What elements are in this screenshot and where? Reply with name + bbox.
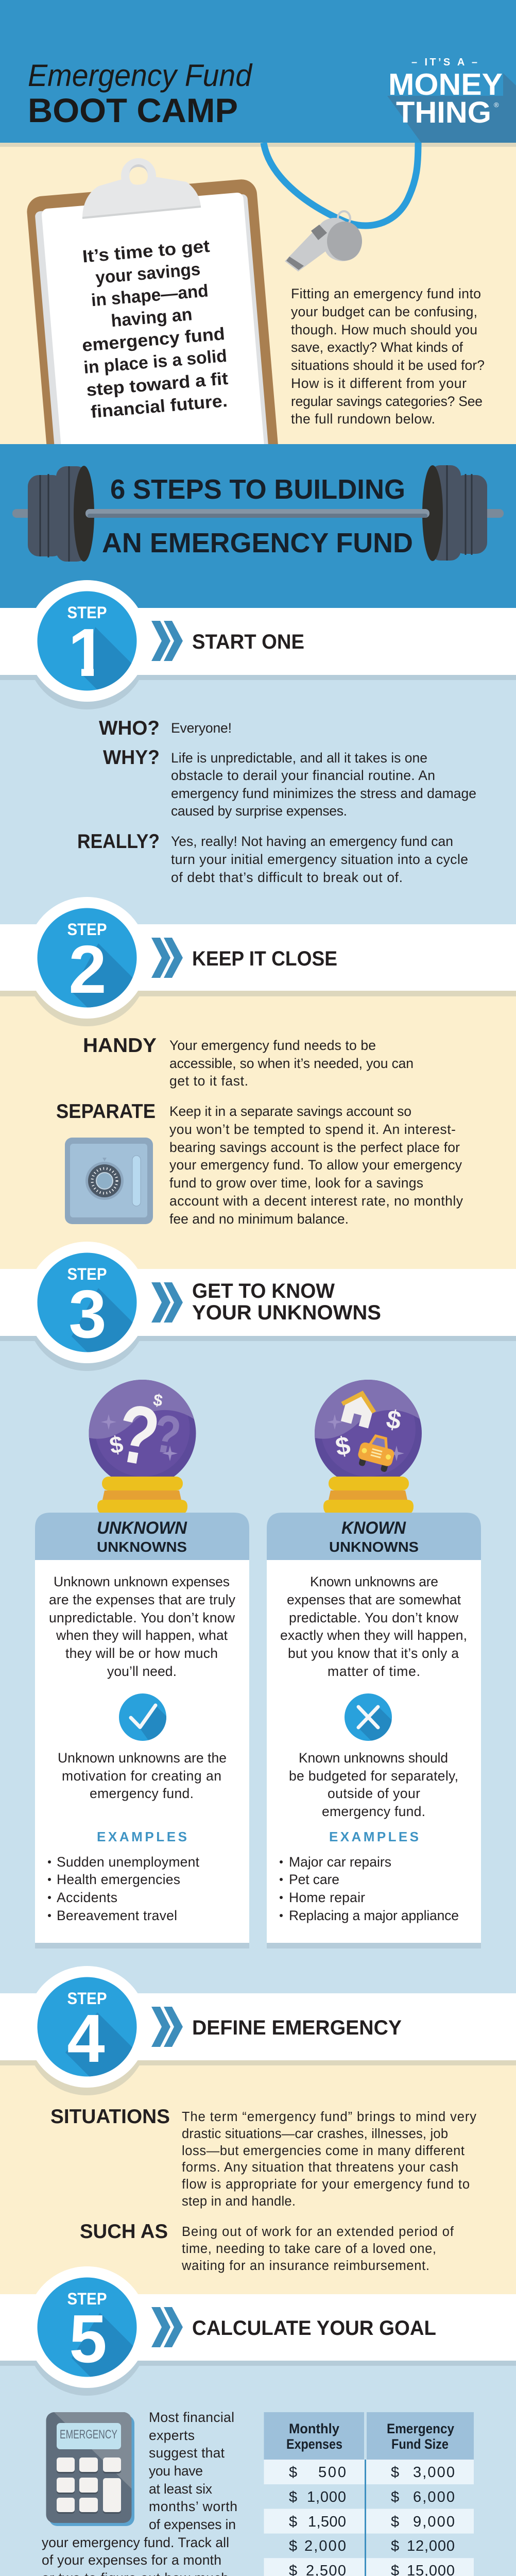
table rows: $ xyxy=(289,2464,297,2481)
budgeting text: Known unknowns should xyxy=(299,1750,448,1766)
table rows: 1,500 xyxy=(308,2514,346,2530)
step 2 header xyxy=(0,897,516,1026)
section background: step 3 xyxy=(0,1336,516,1993)
description: you’ll need. xyxy=(107,1664,177,1679)
chevrons xyxy=(151,2007,183,2047)
description: expenses that are somewhat xyxy=(287,1592,461,1607)
description: unpredictable. You don’t know xyxy=(49,1610,235,1625)
why: Life is unpredictable, and all it takes is one xyxy=(171,750,427,766)
description: when they will happen, what xyxy=(56,1628,228,1643)
separate: Keep it in a separate savings account so xyxy=(169,1104,411,1119)
step 5 header xyxy=(0,2266,516,2396)
examples list: Accidents xyxy=(57,1890,117,1905)
table: monthly expenses vs fund size xyxy=(264,2412,474,2576)
icon: check mark xyxy=(119,1693,166,1741)
crystal ball: unknown unknowns: $ xyxy=(152,1390,164,1410)
panel heading: UNKNOWN xyxy=(97,1518,187,1538)
such as: SUCH AS xyxy=(80,2221,168,2243)
situations: step in and handle. xyxy=(182,2194,296,2209)
table rows: 12,000 xyxy=(407,2538,455,2554)
section background: step 1 xyxy=(0,675,516,924)
handy: accessible, so when it’s needed, you can xyxy=(169,1056,414,1071)
chevrons xyxy=(151,621,183,661)
such as: waiting for an insurance reimbursement. xyxy=(181,2259,429,2273)
separate: fund to grow over time, look for a savings xyxy=(169,1175,423,1191)
crystal ball: unknown unknowns xyxy=(87,1377,198,1513)
icon: calculator xyxy=(46,2412,134,2526)
table header: Monthly xyxy=(289,2421,339,2436)
motivation text: motivation for creating an xyxy=(62,1768,221,1784)
situations: The term “emergency fund” brings to mind very xyxy=(182,2110,476,2124)
examples list: Bereavement travel xyxy=(57,1908,177,1923)
description: matter of time. xyxy=(328,1664,420,1679)
table rows: $ xyxy=(391,2464,399,2481)
budgeting text: outside of your xyxy=(328,1786,420,1801)
motivation text: emergency fund. xyxy=(90,1786,194,1801)
crystal ball: unknown unknowns: $ xyxy=(108,1430,125,1459)
intro paragraph: situations should it be used for? xyxy=(291,358,485,373)
step 5 paragraph: experts xyxy=(149,2428,195,2443)
panel heading xyxy=(97,1518,187,1555)
banner heading: 6 STEPS TO BUILDING xyxy=(110,474,405,505)
table rows: $ xyxy=(391,2538,399,2554)
step 3 badge xyxy=(37,1253,137,1352)
intro paragraph: the full rundown below. xyxy=(291,411,435,427)
situations: drastic situations—car crashes, illnesses, job xyxy=(182,2127,448,2141)
step 4 content xyxy=(50,2106,476,2273)
description: Known unknowns are xyxy=(310,1574,438,1589)
separate: SEPARATE xyxy=(56,1100,156,1123)
section background: step 5 xyxy=(0,2361,516,2576)
step 3 heading xyxy=(192,1280,381,1324)
step 1 content xyxy=(77,717,476,885)
step 4 header xyxy=(0,1966,516,2095)
handy: HANDY xyxy=(83,1035,157,1057)
icon: safe xyxy=(65,1138,153,1224)
table rows: $ xyxy=(391,2514,399,2530)
examples list: Sudden unemployment xyxy=(57,1854,200,1870)
step 4 heading: DEFINE EMERGENCY xyxy=(192,2016,402,2039)
description: are the expenses that are truly xyxy=(49,1592,236,1607)
title: BOOT CAMP xyxy=(28,91,238,129)
situations: forms. Any situation that threatens your cash xyxy=(182,2160,458,2175)
panel heading: UNKNOWNS xyxy=(97,1539,187,1555)
section background: step 4 xyxy=(0,2060,516,2294)
separate xyxy=(56,1100,463,1227)
step 3 header xyxy=(0,1242,516,1371)
intro paragraph: though. How much should you xyxy=(291,322,477,337)
step 2 content xyxy=(56,1035,463,1227)
handy: Your emergency fund needs to be xyxy=(169,1038,376,1053)
why: obstacle to derail your financial routine. An xyxy=(171,768,435,783)
really: turn your initial emergency situation into a cycle xyxy=(171,852,468,867)
table rows: 3,000 xyxy=(413,2464,455,2481)
table rows: 9,000 xyxy=(413,2514,455,2530)
description xyxy=(49,1574,236,1679)
who xyxy=(99,717,232,739)
budgeting text: be budgeted for separately, xyxy=(289,1768,458,1784)
banner heading xyxy=(102,474,413,558)
icon: x mark xyxy=(345,1693,392,1741)
clipboard text: in shape—and xyxy=(91,281,209,310)
table header: Fund Size xyxy=(391,2436,449,2452)
description: they will be or how much xyxy=(65,1646,218,1661)
examples list xyxy=(48,1854,200,1923)
panel: known unknowns xyxy=(267,1513,481,1948)
intro paragraph: save, exactly? What kinds of xyxy=(291,340,463,355)
crystal ball: known unknowns: $ xyxy=(384,1404,403,1435)
handy xyxy=(83,1035,414,1089)
table rows: $ xyxy=(391,2489,399,2505)
description: exactly when they will happen, xyxy=(280,1628,467,1643)
chevrons xyxy=(151,2307,183,2347)
step 5 paragraph: Most financial xyxy=(149,2410,234,2425)
clipboard text: It’s time to get xyxy=(81,236,211,266)
table rows: $ xyxy=(289,2489,297,2505)
logo: It's a Money Thing: THING xyxy=(396,96,491,129)
panel heading: KNOWN xyxy=(341,1518,406,1538)
examples list: Pet care xyxy=(289,1872,339,1887)
step 5 paragraph: at least six xyxy=(149,2481,212,2497)
logo: It's a Money Thing: ® xyxy=(494,101,499,109)
crystal ball: known unknowns: $ xyxy=(333,1431,352,1462)
such as: time, needing to take care of a loved one, xyxy=(182,2242,436,2256)
crystal ball: known unknowns xyxy=(313,1377,424,1513)
intro paragraph xyxy=(291,286,485,427)
step 2 badge: STEP xyxy=(67,920,107,939)
who: Everyone! xyxy=(171,720,232,736)
handy: get to it fast. xyxy=(169,1073,248,1089)
step 1 header xyxy=(0,580,516,709)
who: WHO? xyxy=(99,717,160,739)
icon: calculator: EMERGENCY xyxy=(60,2428,117,2442)
logo: It's a Money Thing xyxy=(387,57,516,143)
intro paragraph: regular savings categories? See xyxy=(291,394,483,409)
table rows: $ xyxy=(289,2514,297,2530)
really: of debt that’s difficult to break out of. xyxy=(171,870,403,885)
really: Yes, really! Not having an emergency fund can xyxy=(171,834,453,849)
examples list: Major car repairs xyxy=(289,1854,391,1870)
step 5 badge: STEP xyxy=(67,2290,107,2308)
separate: account with a decent interest rate, no monthly xyxy=(169,1193,463,1209)
step 5 badge xyxy=(37,2277,137,2377)
really: REALLY? xyxy=(77,831,160,853)
table rows: $ xyxy=(289,2538,297,2554)
examples list: Health emergencies xyxy=(57,1872,180,1887)
step 5 paragraph: your emergency fund. Track all xyxy=(42,2535,229,2550)
description: Unknown unknown expenses xyxy=(54,1574,230,1589)
examples label: EXAMPLES xyxy=(329,1829,419,1844)
separate: you won’t be tempted to spend it. An interest- xyxy=(169,1122,456,1137)
icon: whistle with lanyard xyxy=(264,143,418,272)
clipboard text: financial future. xyxy=(90,391,228,422)
step 5 badge: 5 xyxy=(69,2301,107,2377)
icon: barbell xyxy=(12,465,504,562)
table header xyxy=(286,2421,454,2452)
logo: It's a Money Thing: – IT’S A – xyxy=(411,57,477,68)
step 1 badge: 1 xyxy=(68,615,106,690)
really xyxy=(77,831,468,885)
description: but you know that it’s only a xyxy=(288,1646,459,1661)
why: WHY? xyxy=(103,747,160,769)
panel: unknown unknowns xyxy=(35,1513,249,1948)
step 4 badge: 4 xyxy=(67,2001,105,2076)
step 4 badge: STEP xyxy=(67,1989,107,2008)
intro section background xyxy=(0,143,516,444)
separate: bearing savings account is the perfect place for xyxy=(169,1140,460,1155)
step 2 badge: 2 xyxy=(68,931,107,1007)
crystal ball: unknown unknowns: ? xyxy=(110,1386,166,1484)
table header: Expenses xyxy=(286,2436,342,2452)
table rows: 1,000 xyxy=(307,2489,346,2505)
table rows: 500 xyxy=(318,2464,346,2481)
step 3 badge: 3 xyxy=(68,1276,107,1352)
step 1 badge xyxy=(37,591,137,690)
budgeting text: emergency fund. xyxy=(322,1804,425,1819)
situations xyxy=(50,2106,476,2209)
examples list: Home repair xyxy=(289,1890,365,1905)
title xyxy=(28,58,253,129)
situations: SITUATIONS xyxy=(50,2106,170,2128)
crystal ball: unknown unknowns: ? xyxy=(149,1403,185,1466)
step 5 paragraph xyxy=(42,2410,237,2576)
clipboard text: in place is a solid xyxy=(83,346,228,378)
step 5 paragraph: of your expenses for a month xyxy=(42,2552,221,2568)
separate: your emergency fund. To allow your emergency xyxy=(169,1157,462,1173)
table rows xyxy=(289,2464,455,2576)
motivation text xyxy=(58,1750,227,1801)
description: predictable. You don’t know xyxy=(289,1610,459,1625)
section background: step 2 xyxy=(0,991,516,1269)
examples list: Replacing a major appliance xyxy=(289,1908,459,1923)
step 1 badge: STEP xyxy=(67,603,107,622)
step 5 paragraph: you have xyxy=(149,2463,203,2479)
step 5 paragraph: suggest that xyxy=(149,2445,225,2461)
clipboard text: having an xyxy=(110,304,193,331)
step 3 badge: STEP xyxy=(67,1265,107,1283)
table header: Emergency xyxy=(387,2421,454,2436)
table rows: 6,000 xyxy=(413,2489,455,2505)
such as: Being out of work for an extended period of xyxy=(182,2225,454,2239)
step 5 paragraph: of expenses in xyxy=(149,2517,236,2532)
clipboard text: your savings xyxy=(95,260,201,287)
step 5 heading: CALCULATE YOUR GOAL xyxy=(192,2317,436,2340)
description xyxy=(280,1574,467,1679)
step 2 badge xyxy=(37,908,137,1008)
panel heading: UNKNOWNS xyxy=(329,1539,419,1555)
situations: flow is appropriate for your emergency fund to xyxy=(182,2177,470,2192)
clipboard text: emergency fund xyxy=(81,324,226,355)
banner heading: AN EMERGENCY FUND xyxy=(102,528,413,558)
intro paragraph: your budget can be confusing, xyxy=(291,304,477,319)
step 3 heading: YOUR UNKNOWNS xyxy=(192,1301,381,1324)
chevrons xyxy=(151,938,183,978)
intro paragraph: Fitting an emergency fund into xyxy=(291,286,481,301)
table rows: 2,000 xyxy=(304,2538,346,2554)
situations: loss—but emergencies come in many different xyxy=(182,2144,465,2158)
why: emergency fund minimizes the stress and damage xyxy=(171,786,476,801)
clipboard text: step toward a fit xyxy=(85,369,229,400)
examples label: EXAMPLES xyxy=(97,1829,187,1844)
clipboard text xyxy=(74,236,231,422)
icon: car xyxy=(355,1431,398,1473)
step 2 heading: KEEP IT CLOSE xyxy=(192,947,337,970)
such as xyxy=(80,2221,454,2273)
title: Emergency Fund xyxy=(28,58,253,93)
chevrons xyxy=(151,1282,183,1323)
step 5 paragraph: months’ worth xyxy=(149,2499,237,2514)
step 3 heading: GET TO KNOW xyxy=(192,1280,335,1302)
clipboard xyxy=(26,158,281,495)
step 1 heading: START ONE xyxy=(192,631,304,653)
banner section xyxy=(0,444,516,608)
panel heading xyxy=(329,1518,419,1555)
icon: house xyxy=(336,1386,380,1429)
budgeting text xyxy=(289,1750,458,1819)
intro paragraph: How is it different from your xyxy=(291,376,467,391)
why: caused by surprise expenses. xyxy=(171,803,347,819)
why xyxy=(103,747,476,819)
step 4 badge xyxy=(37,1977,137,2076)
examples list xyxy=(280,1854,459,1923)
logo: It's a Money Thing: MONEY xyxy=(388,67,503,101)
header band xyxy=(0,0,516,143)
motivation text: Unknown unknowns are the xyxy=(58,1750,227,1766)
separate: fee and no minimum balance. xyxy=(169,1211,349,1227)
